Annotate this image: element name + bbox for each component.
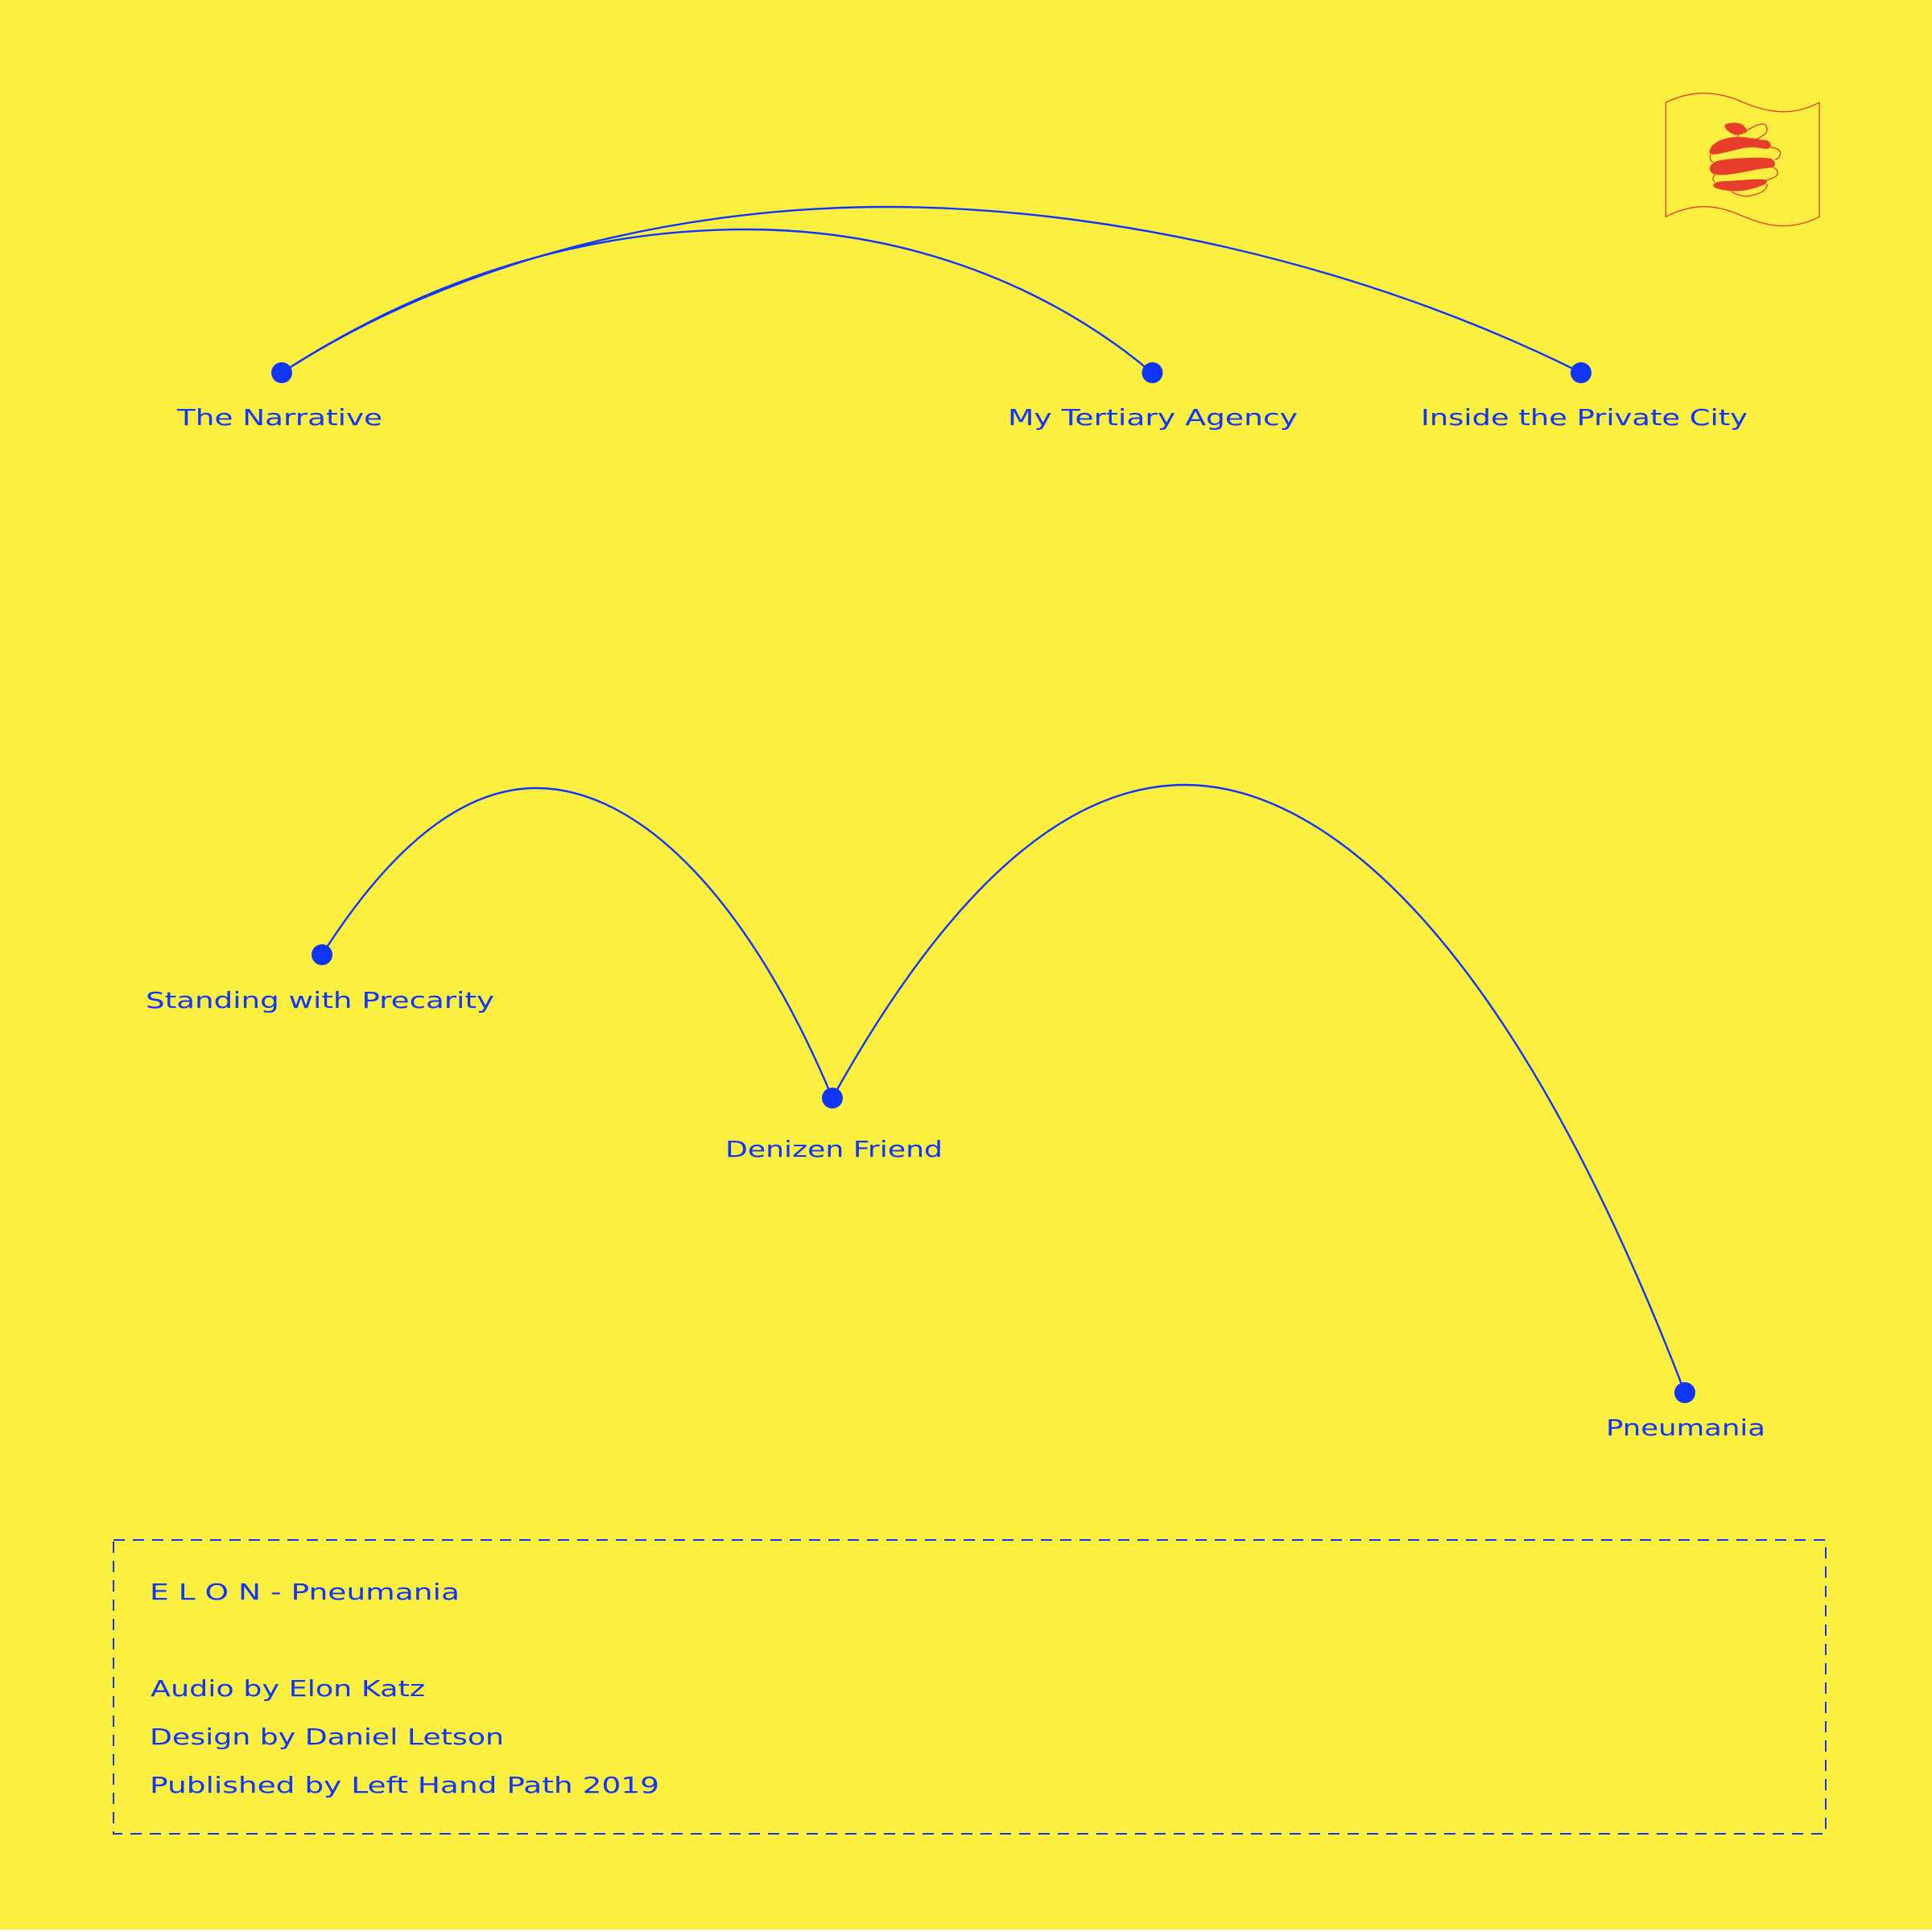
design credit: Design by Daniel Letson (150, 1724, 504, 1750)
node: The Narrative: The Narrative (176, 405, 382, 431)
audio credit: Audio by Elon Katz (151, 1676, 425, 1702)
dashed border (114, 1540, 1826, 1834)
node: Inside the Private City: Inside the Private City (1421, 405, 1748, 431)
node: Standing with Precarity: Standing with Precarity (146, 988, 494, 1013)
node: Standing with Precarity (146, 944, 494, 1013)
credits panel (114, 1540, 1826, 1834)
node: Denizen Friend: Denizen Friend (725, 1137, 943, 1162)
node: The Narrative (176, 362, 382, 431)
logo apple (1709, 122, 1781, 196)
arc: The Narrative to My Tertiary Agency (282, 229, 1152, 373)
node: Pneumania: Pneumania (1606, 1415, 1765, 1441)
arc: Denizen Friend to Pneumania (832, 785, 1685, 1393)
node: Pneumania (1606, 1382, 1765, 1441)
arc: Standing with Precarity to Denizen Friend (322, 788, 832, 1098)
node: My Tertiary Agency: My Tertiary Agency (1008, 405, 1298, 431)
node: Denizen Friend (725, 1088, 943, 1162)
node: My Tertiary Agency (1008, 362, 1298, 431)
logo: flag with apple (1666, 93, 1819, 226)
publisher credit: Published by Left Hand Path 2019 (150, 1773, 659, 1798)
node: Inside the Private City (1421, 362, 1748, 431)
album title: E L O N - Pneumania (150, 1579, 460, 1605)
arc: The Narrative to Inside the Private City (282, 207, 1581, 373)
logo flag outline (1666, 93, 1819, 226)
